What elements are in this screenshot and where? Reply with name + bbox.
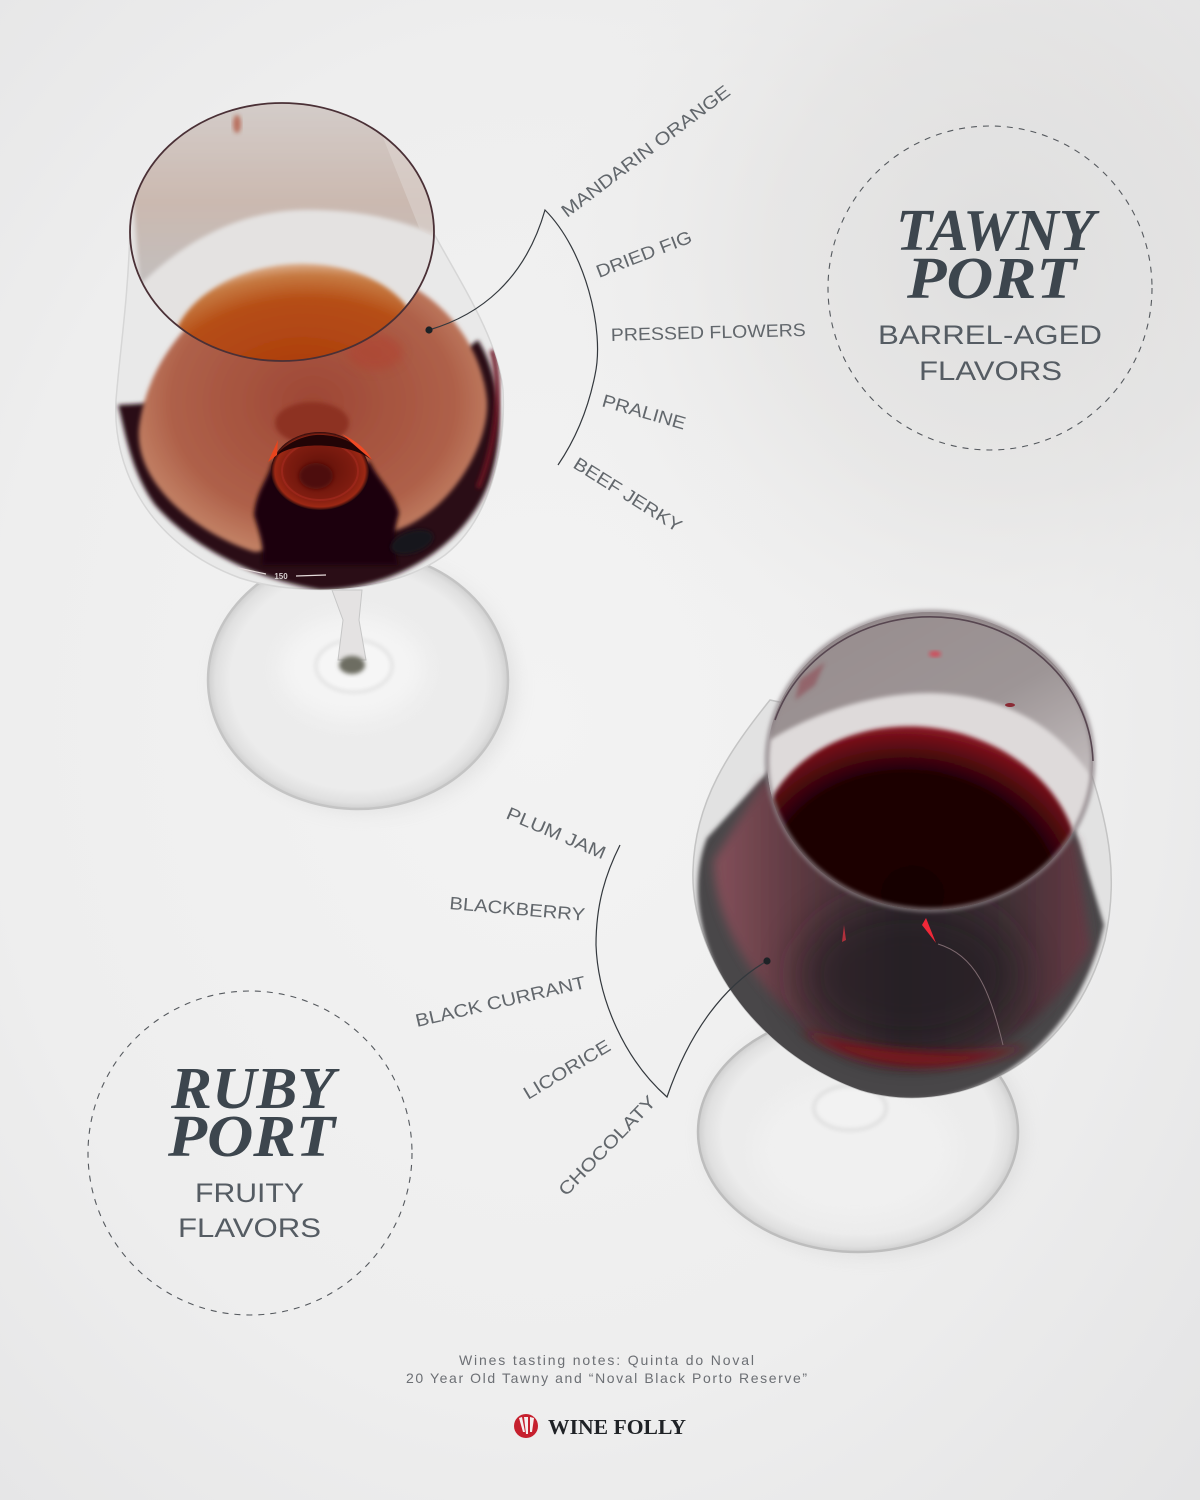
title: tawny port: PORT [906,245,1078,311]
labels: tawny flavors: MANDARIN ORANGE [557,81,734,221]
subtitle: barrel-aged flavors: BARREL-AGED [878,320,1102,350]
foot: ruby glass base [698,1012,1022,1254]
bowl: ruby glass [693,700,1111,1098]
labels: ruby flavors: LICORICE [520,1036,614,1103]
footer note [406,1352,807,1386]
glass: tawny port [116,100,514,810]
foot: tawny glass base [208,551,514,810]
labels: ruby flavors: CHOCOLATY [554,1092,660,1200]
title: tawny port: TAWNY [896,197,1100,263]
bowl: tawny glass [116,230,503,590]
subtitle: barrel-aged flavors: FLAVORS [919,356,1062,386]
labels: tawny flavors [557,81,806,536]
title: ruby port: PORT [167,1103,337,1169]
footer note: 20 Year Old Tawny and “Noval Black Porto Reserve” [406,1370,807,1386]
labels: tawny flavors: BEEF JERKY [570,453,686,536]
callout: tawny port [828,126,1152,450]
rim interior: tawny glass [131,104,433,360]
wine body: ruby [698,770,1104,1100]
footer note: Wines tasting notes: Quinta do Noval [459,1352,754,1368]
labels: ruby flavors: PLUM JAM [503,803,609,863]
subtitle: fruity flavors: FLAVORS [178,1213,321,1243]
rim: tawny glass [130,103,434,361]
leader: tawny flavors arc [425,210,598,465]
rim: ruby glass [767,612,1093,910]
stem [332,590,366,660]
icon: wine folly mark [514,1414,538,1438]
callout: ruby port [88,991,412,1315]
leader: ruby flavors arc [596,845,771,1097]
glass: ruby port [693,600,1111,1254]
rim interior: ruby glass [768,612,1093,910]
logo: wine folly: WINE FOLLY [548,1415,686,1439]
measuring mark 150: 150 [274,572,288,581]
subtitle: fruity flavors: FRUITY [195,1178,304,1208]
subtitle: barrel-aged flavors [878,320,1102,386]
labels: tawny flavors: PRESSED FLOWERS [611,320,806,345]
labels: ruby flavors: BLACKBERRY [449,893,586,925]
labels: ruby flavors: BLACK CURRANT [413,972,587,1031]
labels: ruby flavors [413,803,660,1200]
title: ruby port [167,1055,340,1169]
subtitle: fruity flavors [178,1178,321,1243]
labels: tawny flavors: PRALINE [600,391,688,434]
title: ruby port: RUBY [170,1055,340,1121]
title: tawny port [896,197,1100,311]
measuring mark 150 [238,568,326,579]
wine body: tawny [118,264,499,590]
labels: tawny flavors: DRIED FIG [593,227,695,282]
